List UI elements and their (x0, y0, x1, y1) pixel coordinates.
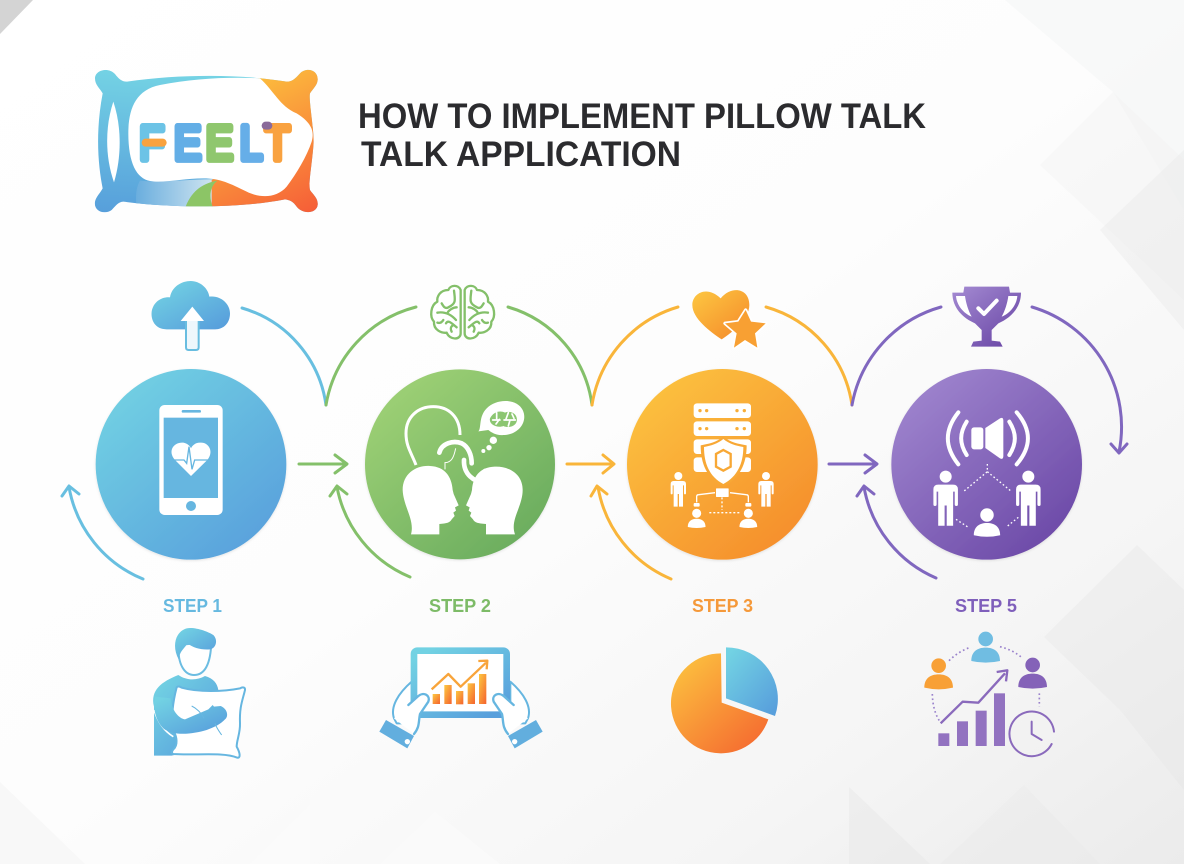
arcs and arrows: step 5 purple (829, 307, 1127, 578)
team members (924, 632, 1047, 721)
title: TALK APPLICATION (361, 135, 681, 174)
clock (1009, 712, 1054, 756)
icon: person hugging pillow (153, 628, 245, 758)
tablet trend arrow (432, 661, 487, 689)
title: HOW TO IMPLEMENT PILLOW TALK (358, 97, 926, 136)
pie chart (671, 647, 778, 753)
growth bars (938, 693, 1005, 746)
step 5 circle with speaker (891, 369, 1082, 560)
step 2 circle with heads (365, 369, 555, 559)
icon: heart and star (692, 290, 766, 348)
right hand thumb and cuff (493, 694, 543, 748)
step 3 circle with server and shield (627, 369, 818, 560)
icon: people and network (671, 472, 774, 528)
tablet bar chart (433, 674, 486, 704)
logo wordmark accents (142, 122, 272, 147)
step labels (163, 596, 1017, 616)
logo wordmark: E (206, 115, 233, 170)
icon: team growth chart with clock (924, 632, 1054, 756)
arcs and arrows: step 1 blue (62, 308, 326, 579)
arcs and arrows: step 3 orange (567, 307, 852, 579)
logo wordmark: T (265, 115, 290, 170)
icon: speaker (948, 412, 1028, 464)
arcs and arrows: step 2 green (299, 307, 592, 577)
left hand thumb and cuff (379, 694, 429, 748)
step labels: STEP 2 (429, 596, 491, 616)
logo wordmark: L (240, 115, 263, 170)
icon: listeners (933, 464, 1041, 537)
fingers behind tablet (393, 682, 529, 723)
growth arrow (941, 670, 1007, 723)
icon: trophy (952, 287, 1021, 347)
icon: hands holding tablet (379, 651, 543, 748)
icon: server rack (694, 403, 751, 472)
icon: thought bubble with brain (478, 401, 524, 453)
icon: shield (701, 437, 747, 487)
step labels: STEP 5 (955, 596, 1017, 616)
icon: phone with heart (159, 405, 223, 515)
icon: brain outline (431, 286, 494, 338)
logo: FEELT pillow (94, 70, 318, 212)
logo wordmark: E (174, 115, 201, 170)
title (358, 97, 926, 174)
step labels: STEP 1 (163, 596, 222, 616)
icon: cloud upload (152, 281, 230, 350)
logo wordmark: F (139, 115, 164, 170)
step labels: STEP 3 (692, 596, 753, 616)
step 1 circle with phone (96, 369, 286, 560)
icon: two heads talking (403, 407, 523, 534)
